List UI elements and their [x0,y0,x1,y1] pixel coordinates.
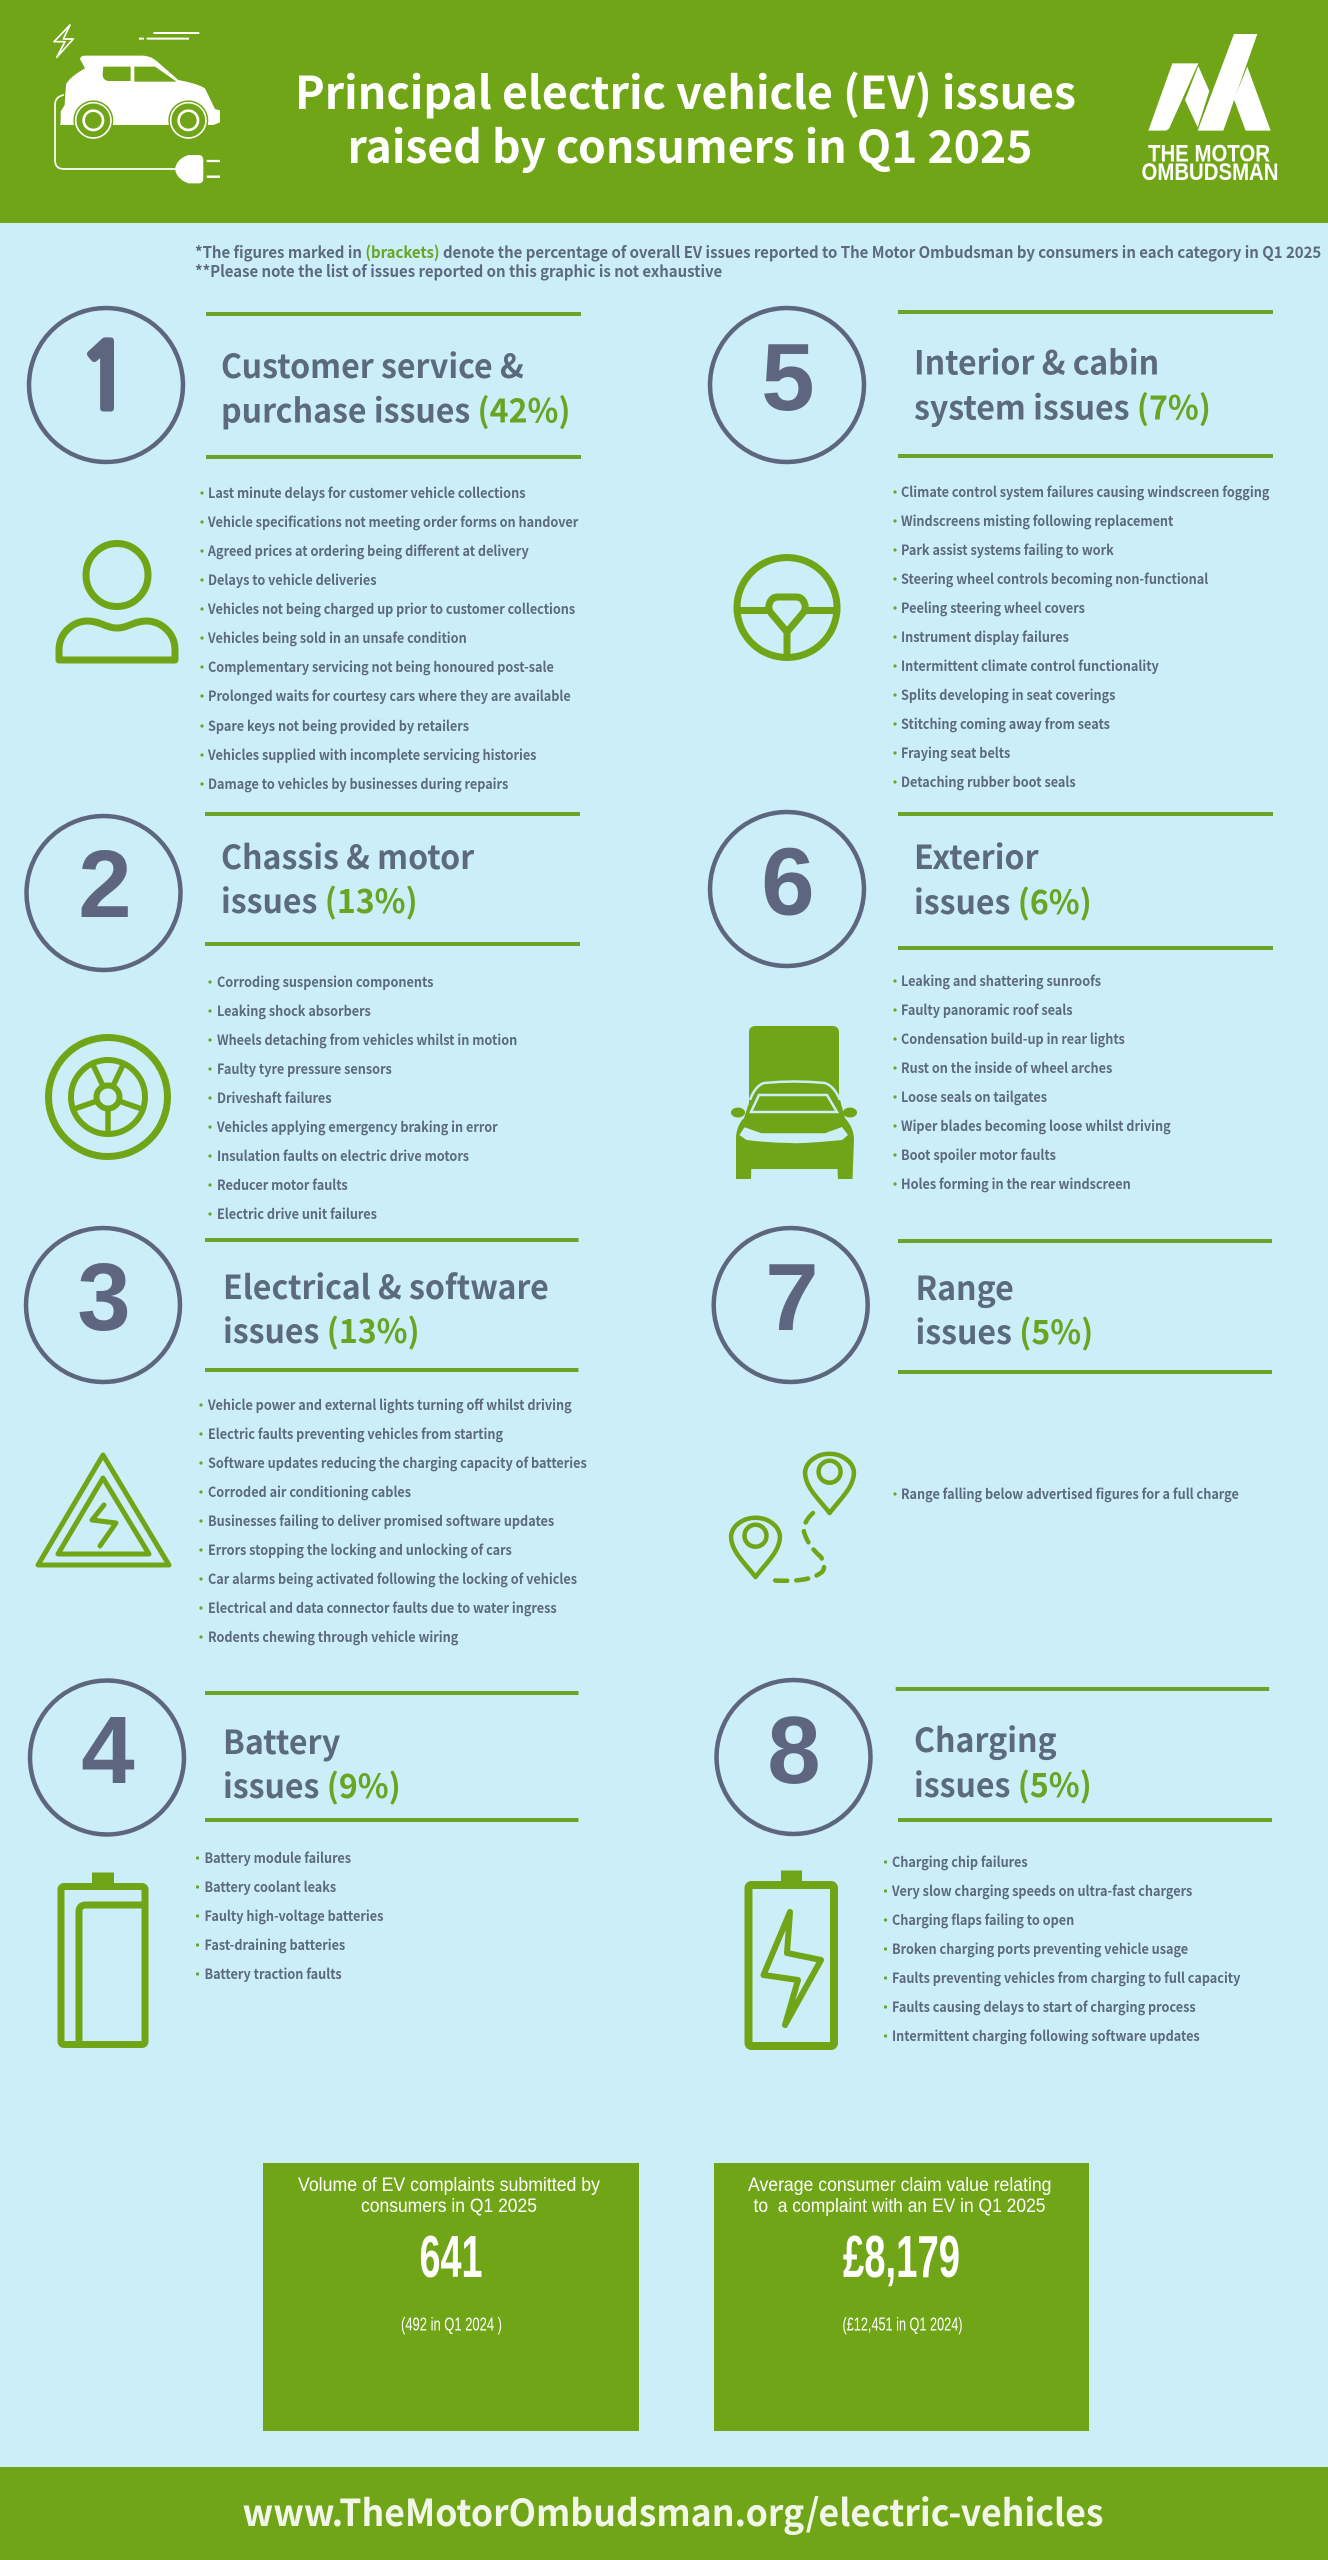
heading: issues (13%) [221,875,418,923]
issue list: Battery traction faults [204,1963,342,1983]
panel: 3 electrical and software issues [26,1228,587,1646]
number badge 3 [26,1228,180,1382]
issue list: Leaking shock absorbers [217,1000,371,1020]
issue list: Vehicles not being charged up prior to customer collections [207,598,576,618]
issue list: Corroded air conditioning cables [208,1481,411,1501]
issue list: Faulty panoramic roof seals [901,999,1073,1019]
number badge 5: 5 [761,324,815,431]
issue list: Vehicles applying emergency braking in error [216,1116,498,1136]
stat box: complaint volume: consumers in Q1 2025 [361,2196,537,2217]
issue list: Prolonged waits for courtesy cars where they are available [208,685,571,705]
issue list: Faults preventing vehicles from charging to full capacity [892,1967,1241,1987]
issue list: Software updates reducing the charging capacity of batteries [208,1452,587,1472]
issue list: Fast-draining batteries [204,1934,346,1954]
issue list: Battery coolant leaks [204,1876,337,1896]
issue list: Charging flaps failing to open [892,1909,1074,1929]
issue list: Vehicle specifications not meeting order forms on handover [207,511,578,531]
panel: 8 charging issues [716,1680,1272,2046]
issue list [893,481,1269,791]
stat box: average claim value: £8,179 [843,2224,960,2290]
icon: wheel [48,1038,168,1156]
heading: Battery [223,1716,340,1764]
issue list: Intermittent charging following software updates [892,2025,1200,2045]
header banner [0,0,1328,223]
issue list: Driveshaft failures [217,1087,332,1107]
stat box: complaint volume: Volume of EV complaints submitted by [298,2175,600,2196]
issue list: Park assist systems failing to work [901,539,1114,559]
issue list: Complementary servicing not being honoured post-sale [208,656,554,676]
issue list: Faults causing delays to start of charging process [892,1996,1196,2016]
issue list: Last minute delays for customer vehicle collections [208,482,526,502]
issue list: Vehicles being sold in an unsafe condition [207,627,467,647]
issue list [208,971,517,1223]
issue list: Reducer motor faults [217,1174,348,1194]
heading: Customer service & [221,340,524,388]
issue list: Intermittent climate control functionality [901,655,1159,675]
issue list [200,482,578,793]
number badge 1 [29,308,183,462]
issue list: Battery module failures [204,1847,351,1867]
issue list [893,970,1171,1193]
heading: issues (5%) [916,1306,1093,1354]
footnotes [195,240,1321,282]
number badge 2: 2 [78,831,132,938]
icon: person [59,544,175,660]
number badge 7: 7 [765,1244,819,1351]
number badge 3: 3 [77,1244,131,1351]
issue list: Windscreens misting following replacement [901,510,1174,530]
logo: The Motor Ombudsman: THE MOTOR [1148,140,1270,168]
heading: Interior & cabin [914,337,1159,385]
issue list: Corroding suspension components [217,971,434,991]
issue list: Rodents chewing through vehicle wiring [208,1626,458,1646]
issue list: Spare keys not being provided by retailers [208,715,469,735]
issue list: Delays to vehicle deliveries [208,569,377,589]
issue list [196,1847,384,1983]
stat box: average claim value [714,2163,1089,2431]
issue list: Boot spoiler motor faults [901,1144,1056,1164]
heading: Electrical & software [223,1261,549,1309]
title: raised by consumers in Q1 2025 [348,111,1032,176]
issue list: Vehicles supplied with incomplete servicing histories [207,744,537,764]
issue list: Detaching rubber boot seals [901,771,1076,791]
stat box: average claim value: Average consumer claim value relating [748,2175,1052,2196]
issue list: Stitching coming away from seats [901,713,1110,733]
issue list: Holes forming in the rear windscreen [901,1173,1131,1193]
issue list: Peeling steering wheel covers [901,597,1085,617]
number badge 8: 8 [767,1697,821,1804]
stat box: average claim value: (£12,451 in Q1 2024) [842,2314,962,2334]
number badge 2 [26,816,180,970]
panel: 5 interior and cabin system issues [710,308,1273,791]
issue list: Insulation faults on electric drive motors [217,1145,469,1165]
heading: Range [916,1262,1014,1310]
icon: steering wheel [737,558,837,658]
footer banner with URL [0,2467,1328,2560]
stat box: complaint volume [263,2163,639,2431]
footer banner with URL: www.TheMotorOmbudsman.org/electric-vehicles [242,2483,1104,2537]
stat box: average claim value: to a complaint with an EV in Q1 2025 [754,2196,1046,2217]
panel: 1 customer service and purchase issues [29,308,581,793]
issue list: Leaking and shattering sunroofs [901,970,1101,990]
issue list: Damage to vehicles by businesses during repairs [208,773,509,793]
issue list: Electric faults preventing vehicles from starting [208,1423,503,1443]
logo: The Motor Ombudsman [1142,34,1278,186]
issue list: Range falling below advertised figures for a full charge [901,1483,1239,1503]
issue list: Broken charging ports preventing vehicle usage [892,1938,1188,1958]
issue list: Instrument display failures [901,626,1069,646]
panel: 2 chassis and motor issues [26,812,580,1223]
icon: charging battery [748,1876,834,2046]
number badge 4 [30,1680,184,1834]
icon: electric car with charging plug [54,25,220,183]
footnotes: *The figures marked in (brackets) denote the percentage of overall EV issues reported to The Motor Ombudsman by consumers in each category in Q1 2025 [195,240,1321,263]
heading: issues (5%) [914,1759,1092,1807]
panel: 6 exterior issues [710,812,1273,1193]
issue list [199,1394,587,1646]
issue list: Rust on the inside of wheel arches [901,1057,1113,1077]
number badge 8 [716,1680,870,1834]
issue list [884,1851,1241,2045]
heading: Chassis & motor [221,831,474,879]
heading: Exterior [914,831,1039,879]
issue list: Faulty tyre pressure sensors [217,1058,392,1078]
number badge 7 [714,1228,868,1382]
issue list: Businesses failing to deliver promised software updates [208,1510,555,1530]
issue list: Fraying seat belts [901,742,1011,762]
heading: purchase issues (42%) [221,385,571,433]
issue list: Errors stopping the locking and unlocking of cars [208,1539,512,1559]
number badge 6: 6 [761,828,815,936]
heading: issues (6%) [914,876,1092,924]
issue list: Agreed prices at ordering being different at delivery [207,540,529,560]
issue list: Steering wheel controls becoming non-functional [901,568,1208,588]
issue list: Electric drive unit failures [217,1203,377,1223]
icon: route between two map pins [731,1454,854,1581]
icon: high-voltage warning triangle [38,1455,169,1565]
issue list: Very slow charging speeds on ultra-fast chargers [891,1880,1193,1900]
issue list: Car alarms being activated following the locking of vehicles [208,1568,577,1588]
panel: 4 battery issues [30,1680,578,2044]
issue list: Charging chip failures [892,1851,1028,1871]
heading: Charging [914,1714,1057,1762]
issue list: Splits developing in seat coverings [901,684,1116,704]
issue list: Wiper blades becoming loose whilst driving [901,1115,1171,1135]
issue list: Condensation build-up in rear lights [901,1028,1125,1048]
title [295,57,1076,176]
stat box: complaint volume: (492 in Q1 2024 ) [401,2314,502,2334]
number badge 1: 1 [77,332,133,423]
issue list: Climate control system failures causing windscreen fogging [901,481,1269,501]
issue list: Loose seals on tailgates [901,1086,1047,1106]
footnotes: **Please note the list of issues reported on this graphic is not exhaustive [195,259,722,282]
icon: battery [61,1878,145,2044]
heading: system issues (7%) [914,382,1211,430]
logo: The Motor Ombudsman: OMBUDSMAN [1142,159,1278,186]
issue list: Vehicle power and external lights turning off whilst driving [207,1394,572,1414]
title: Principal electric vehicle (EV) issues [295,57,1076,122]
stat box: complaint volume: 641 [420,2224,482,2290]
issue list: Faulty high-voltage batteries [204,1905,384,1925]
issue list: Wheels detaching from vehicles whilst in motion [217,1029,517,1049]
panel: 7 range issues [714,1228,1272,1581]
issue list: Electrical and data connector faults due to water ingress [208,1597,557,1617]
heading: issues (9%) [223,1760,401,1808]
icon: car with open bonnet [731,1026,857,1179]
heading: issues (13%) [223,1305,420,1353]
number badge 4: 4 [81,1697,135,1804]
number badge 5 [710,308,864,462]
number badge 6 [710,812,864,966]
